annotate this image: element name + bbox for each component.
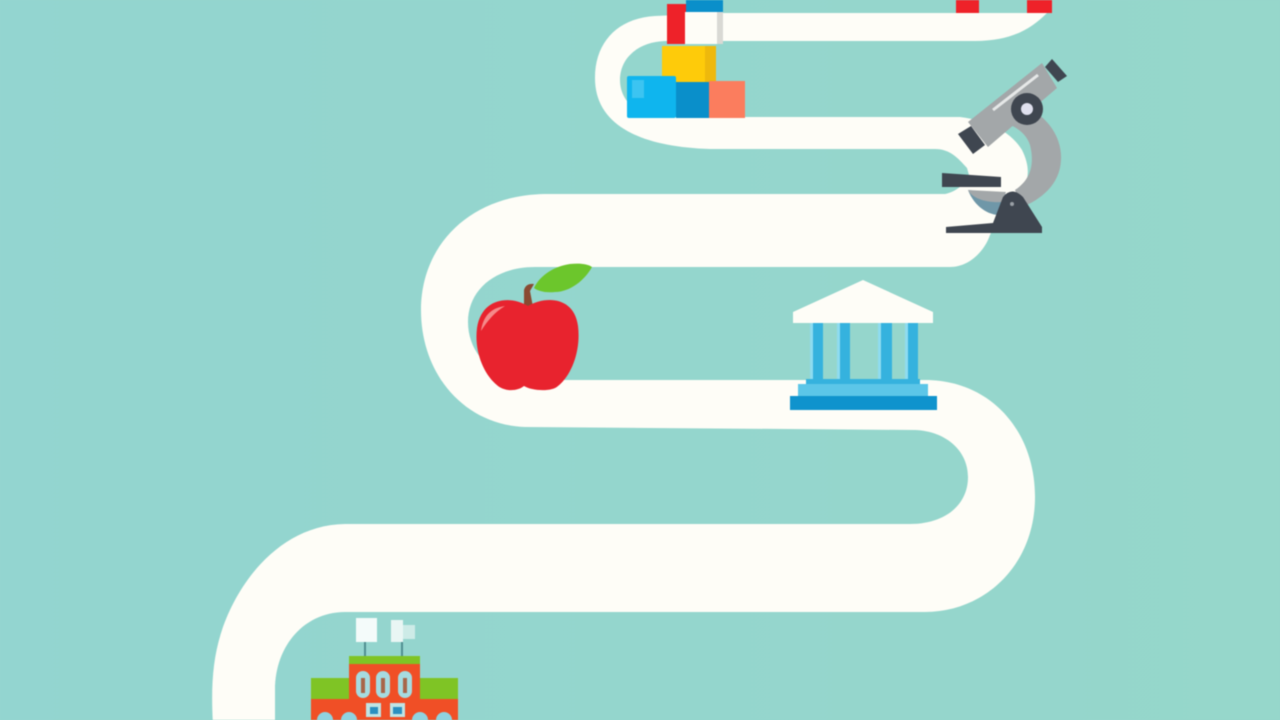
icon: apple xyxy=(476,264,592,390)
icon: school building xyxy=(311,618,458,720)
icon: microscope xyxy=(942,59,1067,233)
icon: classical building xyxy=(790,280,937,410)
icon: stacked toy blocks xyxy=(627,0,1052,118)
winding road xyxy=(212,13,1047,720)
